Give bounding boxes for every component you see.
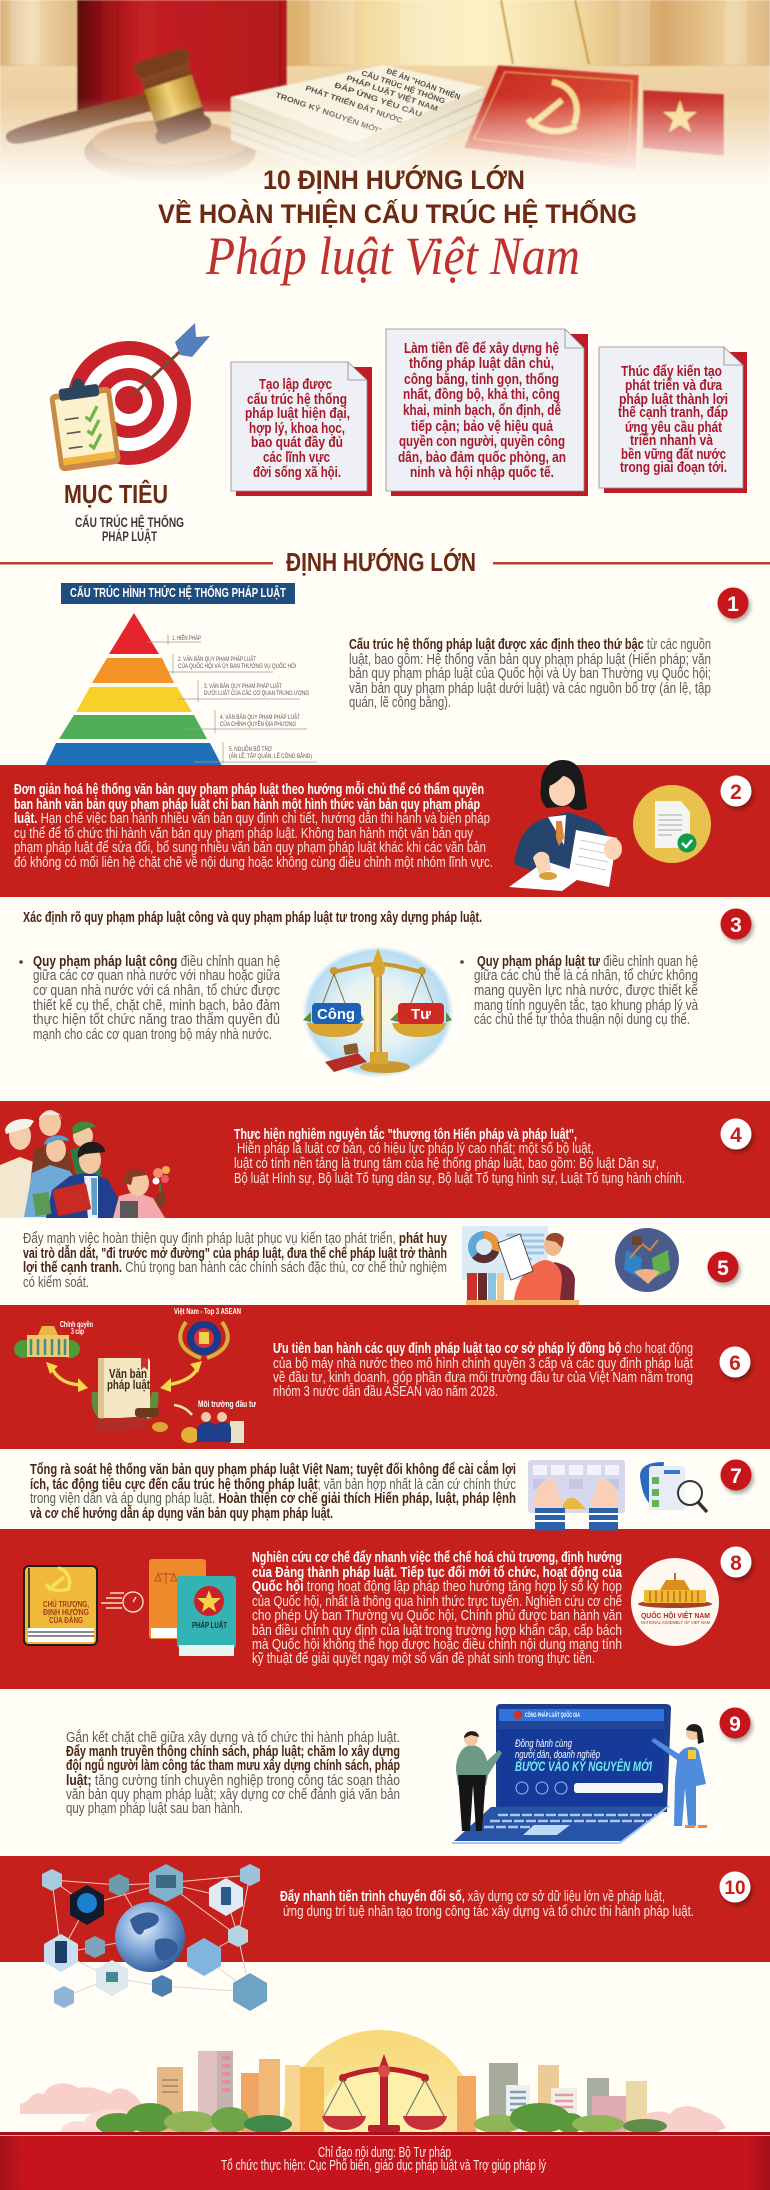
badge 4: 4: [730, 1124, 742, 1147]
card: objective 3: phát triển và đưa: [625, 378, 723, 394]
text block 9: Đẩy mạnh truyền thông chính sách, pháp luật; chăm lo xây dựng: [66, 1744, 400, 1760]
buildings: [157, 2051, 647, 2132]
panel 1: pyramid chart and text: [45, 583, 748, 766]
card: objective 1: Tạo lập được: [259, 377, 332, 393]
card: objective 1: [231, 362, 372, 496]
illustration: laptop with national law portal: [452, 1704, 671, 1843]
panel 9: law communication: [66, 1704, 750, 1843]
card: objective 2: ninh và hội nhập quốc tế.: [410, 465, 554, 481]
label: three levels: 3 cấp: [71, 1327, 84, 1336]
text block: private law: các chủ thể tự thỏa thuận nội dung cụ thể.: [474, 1012, 690, 1028]
label: investment environment: Môi trường đầu tư: [198, 1399, 256, 1409]
pyramid chart: CỦA QUỐC HỘI VÀ ỦY BAN THƯỜNG VỤ QUỐC HỘI: [178, 663, 296, 670]
text block 2: [14, 781, 493, 871]
panel 2: simplify documents: [0, 760, 770, 897]
card: objective 1: pháp luật hiện đại,: [245, 406, 350, 422]
title: VỀ HOÀN THIỆN CẤU TRÚC HỆ THỐNG: [158, 197, 637, 229]
card: objective 2: công bằng, tinh gọn, thống: [404, 370, 559, 388]
text block 8: mà Quốc hội không thể họp được hoặc điều chỉnh nội dung mang tính: [252, 1637, 622, 1653]
badge 7: [720, 1460, 752, 1490]
pyramid chart: (ÁN LỆ, TẬP QUÁN, LẼ CÔNG BẰNG): [229, 752, 312, 760]
illustration: man presenting: [456, 1731, 502, 1831]
text block 5: Đẩy mạnh việc hoàn thiện quy định pháp luật phục vụ kiến tạo phát triển, phát huy: [23, 1231, 447, 1247]
text block 10: [280, 1889, 694, 1920]
card: objective 2: thống pháp luật dân chủ,: [409, 356, 554, 372]
text block 1: [349, 637, 711, 711]
panel 6: priority regulations: [0, 1305, 770, 1449]
chart header: CẤU TRÚC HÌNH THỨC HỆ THỐNG PHÁP LUẬT: [70, 585, 286, 600]
card: objective 2: dân, bảo đảm quốc phòng, an: [398, 450, 566, 466]
footer: Tổ chức thực hiện: Cục Phổ biến, giáo dục pháp luật và Trợ giúp pháp lý: [221, 2158, 547, 2174]
pyramid chart: 5. NGUỒN BỔ TRỢ: [229, 746, 272, 753]
card: objective 2: quyền con người, quyền công: [399, 434, 565, 450]
arrows: [51, 1367, 198, 1415]
text block 5: vai trò dẫn dắt, "đi trước mở đường" của pháp luật, đưa thể chế pháp luật trở thành: [23, 1244, 447, 1262]
title: Pháp luật Việt Nam: [205, 226, 580, 286]
text block 5: [23, 1231, 447, 1291]
text block 9: đội ngũ người làm công tác tham mưu xây dựng chính sách, pháp: [66, 1758, 400, 1774]
card: objective 3: trong giai đoạn tới.: [620, 460, 727, 476]
text block 10: Đẩy nhanh tiến trình chuyển đổi số, xây dựng cơ sở dữ liệu lớn về pháp luật,: [280, 1889, 665, 1905]
badge 7: 7: [730, 1465, 742, 1488]
icon: party policy book: [24, 1566, 97, 1645]
text block 4: Hiến pháp là luật cơ bản, có hiệu lực pháp lý cao nhất; một số bộ luật,: [237, 1141, 594, 1157]
text block 8: của Quốc hội, nhất là thông qua hình thức trực tuyến. Nghiên cứu cơ chế: [252, 1594, 622, 1610]
illustration: scales Công / Tư: Công: [317, 1006, 355, 1023]
card: objective 3: ứng yêu cầu phát: [625, 420, 722, 436]
icon: legal document book: Văn bản: [109, 1366, 147, 1381]
badge 1: [718, 588, 748, 618]
card: objective 1: hợp lý, khoa học,: [249, 421, 345, 437]
text block 2: Đơn giản hoá hệ thống văn bản quy phạm pháp luật theo hướng mỗi chủ thể có thẩm quyền: [14, 781, 484, 798]
book text: ĐÁP ỨNG YÊU CẦU: [333, 79, 424, 119]
pyramid chart: 2. VĂN BẢN QUY PHẠM PHÁP LUẬT: [178, 656, 256, 663]
objective subheading: [75, 515, 184, 544]
text block 9: Gắn kết chặt chẽ giữa xây dựng và tổ chức thi hành pháp luật.: [66, 1729, 400, 1746]
objective heading: MỤC TIÊU: [64, 479, 168, 509]
book text: CẤU TRÚC HỆ THỐNG: [360, 67, 447, 106]
objective subheading: PHÁP LUẬT: [102, 529, 158, 544]
icon: document check: [633, 785, 711, 863]
card: objective 2: Làm tiền đề để xây dựng hệ: [404, 341, 559, 357]
text block: private law: giữa các chủ thể là cá nhân, tổ chức không: [474, 968, 698, 984]
text block: public law: [19, 954, 281, 1043]
illustration: digital network globe: [42, 1864, 267, 2011]
text block: public law: thiết kế cụ thể, chặt chẽ, minh bạch, bảo đảm: [33, 998, 280, 1014]
icon: speed meter: [101, 1592, 143, 1612]
illustration: scales Công / Tư: Tư: [411, 1006, 431, 1023]
label: top 3 ASEAN: Việt Nam - Top 3 ASEAN: [174, 1307, 241, 1316]
badge 5: [708, 1252, 738, 1282]
text block 8: bản điều chỉnh quy định của luật trong trường hợp khẩn cấp, cấp bách: [252, 1623, 622, 1639]
illustration: analyst with charts: [462, 1226, 579, 1307]
title: 10 ĐỊNH HƯỚNG LỚN: [263, 164, 525, 195]
text block 7: Tổng rà soát hệ thống văn bản quy phạm pháp luật Việt Nam; tuyệt đối không để cài cắm lợi: [30, 1460, 516, 1478]
pyramid chart: DƯỚI LUẬT CỦA CÁC CƠ QUAN TRUNG ƯƠNG: [204, 690, 309, 697]
text block 6: [273, 1341, 693, 1400]
illustration: scales Công / Tư: [302, 946, 454, 1078]
illustration: laptop with national law portal: Đồng hành cùng: [515, 1738, 573, 1750]
text block 9: quy phạm pháp luật sau ban hành.: [66, 1801, 243, 1817]
logo: National Assembly of Viet Nam: NATIONAL ASSEMBLY OF VIET NAM: [641, 1620, 710, 1625]
text block 9: văn bản quy phạm pháp luật; xây dựng cơ chế đánh giá văn bản: [66, 1787, 400, 1803]
icon: party policy book: CHỦ TRƯƠNG,: [43, 1600, 89, 1609]
illustration: citizens group: [0, 1110, 170, 1218]
text block 2: phạm pháp luật để sửa đổi, bổ sung nhiều văn bản quy phạm pháp luật khác khi các văn bản: [14, 840, 486, 856]
panel 8: institutionalising party policy: [0, 1529, 770, 1689]
illustration: official with document: [509, 760, 622, 891]
illustration: hands on keyboard: [528, 1460, 625, 1530]
text block: private law: mang tính nguyên tắc, tạo khung pháp lý và: [474, 997, 699, 1014]
text block 7: [30, 1460, 516, 1522]
text block 9: luật; tăng cường tính chuyên nghiệp trong công tác soạn thảo: [66, 1773, 400, 1789]
pyramid chart: 3. VĂN BẢN QUY PHẠM PHÁP LUẬT: [204, 683, 282, 690]
card: objective 3: pháp luật thành lợi: [619, 392, 728, 408]
text block 1: Cấu trúc hệ thống pháp luật được xác định theo thứ bậc từ các nguồn: [349, 637, 711, 653]
icon: target with arrow: [67, 323, 210, 465]
text block 1: quán, lẽ công bằng).: [349, 694, 451, 711]
badge 10: [720, 1872, 750, 1902]
card: objective 1: bao quát đầy đủ: [251, 435, 343, 451]
pyramid chart: [45, 613, 317, 766]
badge 2: [720, 776, 752, 806]
icon: clipboard checklist: [47, 374, 121, 472]
illustration: woman presenting: [651, 1724, 707, 1828]
badge 6: [720, 1346, 750, 1378]
text block 8: cho phép Uỷ ban Thường vụ Quốc hội, Chính phủ được ban hành văn: [252, 1608, 622, 1624]
text block: public law: cơ quan nhà nước với cá nhân, tổ chức được: [33, 983, 280, 999]
chart header: [61, 583, 295, 604]
icon: handshake growth: [615, 1228, 679, 1292]
badge 5: 5: [717, 1257, 729, 1280]
icon: law books: PHÁP LUẬT: [192, 1621, 227, 1630]
text block 7: trong viện dẫn và áp dụng pháp luật. Hoàn thiện cơ chế giải thích Hiến pháp, luật, pháp lệnh: [30, 1490, 516, 1507]
text block 7: ích, tác động tiêu cực đến cấu trúc hệ thống pháp luật; văn bản hợp nhất là căn cứ chính thức: [30, 1477, 516, 1493]
objective subheading: CẤU TRÚC HỆ THỐNG: [75, 515, 184, 530]
illustration: city skyline with scales: [20, 2030, 726, 2190]
label: three levels: [60, 1320, 93, 1336]
pyramid chart: CỦA CHÍNH QUYỀN ĐỊA PHƯƠNG: [220, 721, 296, 728]
pyramid chart: 4. VĂN BẢN QUY PHẠM PHÁP LUẬT: [220, 714, 300, 721]
text block 2: ban hành văn bản quy phạm pháp luật chỉ ban hành một hình thức văn bản quy phạm pháp: [14, 797, 480, 813]
panel 10: digital transformation: [0, 1856, 770, 2011]
hero illustration: law books and gavel: [0, 0, 770, 202]
badge 2: 2: [730, 781, 742, 804]
book text: PHÁT TRIỂN ĐẤT NƯỚC: [304, 82, 405, 125]
card: objective 2: khai, minh bạch, ổn định, dễ: [403, 402, 561, 419]
diagram: legal documents linked to goals: [14, 1307, 256, 1443]
text block 8: Nghiên cứu cơ chế đẩy nhanh việc thể chế hoá chủ trương, định hướng: [252, 1550, 622, 1566]
card: objective 3: triển nhanh và: [630, 433, 714, 449]
text block 8: Quốc hội trong hoạt động lập pháp theo hướng tăng hợp lý số kỳ họp: [252, 1579, 622, 1595]
icon: law books: [149, 1559, 236, 1656]
card: objective 3: bền vững đất nước: [621, 447, 726, 463]
text block 8: của Đảng thành pháp luật. Tiếp tục đổi mới tổ chức, hoạt động của: [252, 1565, 623, 1581]
icon: investors with money bags: [181, 1412, 244, 1443]
text block 8: [252, 1550, 623, 1667]
badge 3: 3: [730, 914, 742, 937]
footer: [0, 2132, 770, 2190]
illustration: laptop with national law portal: BƯỚC VÀO KỶ NGUYÊN MỚI: [515, 1757, 653, 1774]
icon: party policy book: ĐỊNH HƯỚNG: [43, 1608, 89, 1617]
card: objective 1: cấu trúc hệ thống: [247, 392, 347, 408]
badge 4: [720, 1118, 752, 1150]
badge 3: [720, 908, 752, 940]
card: objective 2: [386, 329, 588, 496]
icon: party policy book: CỦA ĐẢNG: [49, 1616, 83, 1625]
text block 2: luật. Hạn chế việc ban hành nhiều văn bản quy định chi tiết, hướng dẫn thi hành và biện pháp: [14, 810, 490, 827]
badge 9: [720, 1708, 750, 1738]
icon: checklist with magnifier: [640, 1462, 707, 1512]
book text: TRONG KỶ NGUYÊN MỚI": [274, 90, 384, 136]
text block: public law: thực hiện tốt chức năng trao thẩm quyền đủ: [33, 1012, 280, 1028]
badge 9: 9: [729, 1713, 741, 1736]
trees: [96, 2103, 667, 2135]
heading 3: Xác định rõ quy phạm pháp luật công và quy phạm pháp luật tư trong xây dựng pháp luật.: [23, 910, 482, 926]
badge 8: [720, 1546, 752, 1578]
text block: public law: Quy phạm pháp luật công điều chỉnh quan hệ: [33, 954, 280, 970]
text block: public law: mạnh cho các cơ quan trong bộ máy nhà nước.: [33, 1027, 272, 1043]
card: objective 3: thế cạnh tranh, đáp: [618, 405, 728, 421]
book text: [274, 65, 462, 136]
text block 2: cụ thể để tổ chức thi hành văn bản quy phạm pháp luật. Không ban hành một văn bản quy: [14, 826, 474, 842]
text block 6: nhóm 3 nước dẫn đầu ASEAN vào năm 2028.: [273, 1383, 498, 1400]
card: objective 1: các lĩnh vực: [263, 450, 330, 466]
badge 8: 8: [730, 1552, 742, 1575]
icon: ASEAN emblem: [180, 1321, 228, 1358]
card: objective 3: Thúc đẩy kiến tạo: [621, 364, 722, 380]
text block 4: [234, 1125, 685, 1187]
panel: objective: [47, 323, 210, 544]
text block 8: kỹ thuật để giải quyết ngay một số vấn đề phát sinh trong thực tiễn.: [252, 1650, 595, 1667]
card: objective 1: đời sống xã hội.: [253, 465, 341, 481]
book text: ĐỀ ÁN "HOÀN THIỆN: [385, 65, 462, 102]
badge 6: 6: [729, 1352, 741, 1375]
scales icon: [322, 2054, 447, 2132]
badge 10: 10: [724, 1878, 746, 1899]
text block: private law: mang quyền lực nhà nước, được thiết kế: [474, 983, 698, 999]
icon: legal document book: pháp luật: [107, 1377, 150, 1392]
text block 9: [66, 1729, 400, 1817]
text block 2: đó không có mối liên hệ chặt chẽ về nội dung hoặc không cùng điều chỉnh một nhóm lĩnh vực.: [14, 855, 493, 871]
title: [158, 164, 637, 286]
footer: Chỉ đạo nội dung: Bộ Tư pháp: [318, 2145, 451, 2161]
text block 4: Thực hiện nghiêm nguyên tắc "thượng tôn Hiến pháp và pháp luật",: [234, 1125, 577, 1143]
icon: government building: [14, 1320, 80, 1358]
text block: private law: Quy phạm pháp luật tư điều chỉnh quan hệ: [477, 954, 698, 970]
text block: private law: [460, 954, 699, 1028]
text block: public law: giữa các cơ quan nhà nước với nhau hoặc giữa: [33, 968, 281, 984]
text block 5: có kiểm soát.: [23, 1275, 89, 1291]
text block 5: lợi thế cạnh tranh. Chú trọng ban hành các chính sách đặc thù, cơ chế thử nghiệm: [23, 1260, 447, 1276]
panel 3: public and private law: [19, 908, 751, 1078]
illustration: laptop with national law portal: người dân, doanh nghiệp: [515, 1749, 600, 1761]
label: three levels: Chính quyền: [60, 1320, 93, 1329]
icon: legal document book: [91, 1358, 168, 1433]
text block 6: Ưu tiên ban hành các quy định pháp luật tạo cơ sở pháp lý đồng bộ cho hoạt động: [273, 1341, 693, 1357]
text block 4: luật có tính nền tảng là trung tâm của hệ thống pháp luật, bao gồm: Bộ luật Dân sự,: [234, 1156, 659, 1172]
card: objective 3: [599, 347, 747, 493]
card: objective 2: tiếp cận; bảo vệ hiệu quả: [411, 419, 554, 435]
panel 5: legal framework for development: [23, 1226, 738, 1307]
logo: National Assembly of Viet Nam: QUỐC HỘI VIỆT NAM: [641, 1610, 710, 1620]
logo: National Assembly of Viet Nam: [631, 1558, 719, 1646]
book text: PHÁP LUẬT VIỆT NAM: [345, 73, 439, 113]
pyramid chart: 1. HIẾN PHÁP: [172, 635, 201, 642]
heading: major orientations: ĐỊNH HƯỚNG LỚN: [286, 547, 476, 577]
panel 4: supremacy of the constitution: [0, 1101, 770, 1218]
panel 7: review legal documents: [30, 1460, 752, 1530]
badge 1: 1: [727, 593, 739, 616]
illustration: laptop with national law portal: CỔNG PHÁP LUẬT QUỐC GIA: [525, 1712, 580, 1719]
card: objective 2: nhất, đồng bộ, khả thi, công: [403, 387, 560, 403]
text block 7: và cơ chế hướng dẫn áp dụng văn bản quy phạm pháp luật.: [30, 1505, 333, 1522]
